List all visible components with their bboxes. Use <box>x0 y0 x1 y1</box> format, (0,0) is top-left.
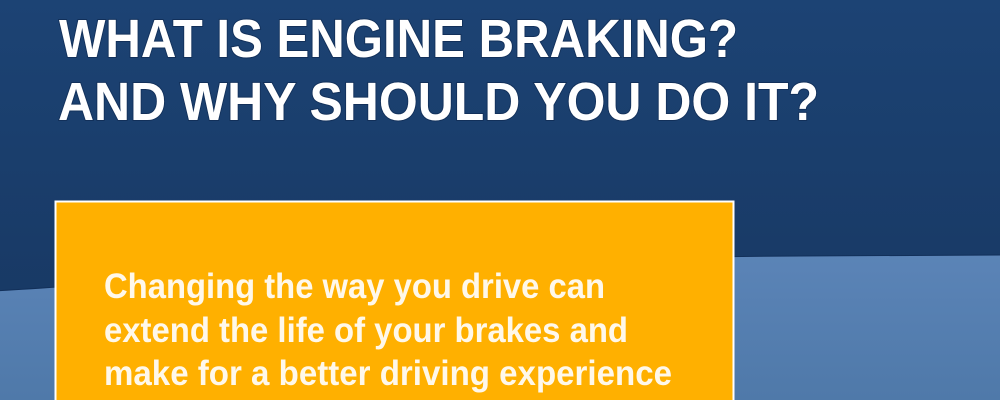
title: WHAT IS ENGINE BRAKING? <box>59 9 738 69</box>
orange callout panel <box>56 202 734 400</box>
callout text: Changing the way you drive can <box>104 267 605 306</box>
panel: orange box <box>56 202 734 400</box>
light blue hill <box>0 255 1000 400</box>
callout text: extend the life of your brakes and <box>104 311 628 350</box>
callout text <box>104 267 672 393</box>
title <box>58 9 819 132</box>
title: AND WHY SHOULD YOU DO IT? <box>58 72 819 132</box>
callout text: make for a better driving experience <box>104 354 672 393</box>
